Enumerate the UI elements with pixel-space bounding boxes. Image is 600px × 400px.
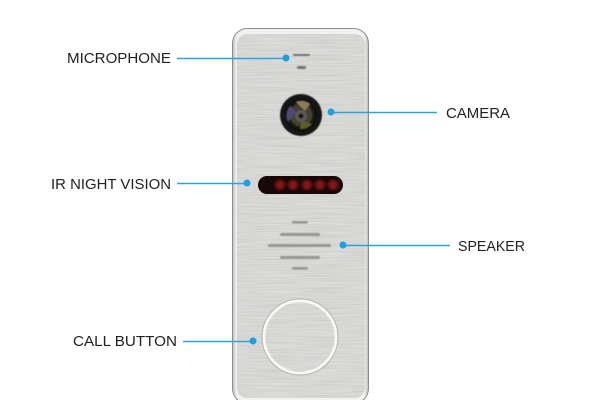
- IR night vision LED strip: [258, 176, 343, 194]
- device body: [232, 28, 368, 400]
- label: speaker: SPEAKER: [458, 239, 525, 255]
- camera lens: [280, 94, 322, 136]
- label: speaker: [340, 239, 525, 255]
- label: call button: CALL BUTTON: [73, 334, 177, 350]
- speaker slots: [268, 221, 331, 270]
- label: camera: [328, 106, 510, 122]
- label: call button: [73, 334, 256, 350]
- infographic: door camera diagram: [52, 28, 524, 400]
- label: camera: CAMERA: [446, 106, 510, 122]
- label: IR night vision: IR NIGHT VISION: [51, 177, 171, 193]
- call button: [262, 299, 338, 375]
- label: microphone: MICROPHONE: [67, 51, 171, 67]
- label: IR night vision: [51, 177, 250, 193]
- brushed metal plate: [237, 34, 365, 398]
- microphone holes: [293, 54, 310, 69]
- label: microphone: [67, 51, 290, 67]
- outer frame: [232, 28, 368, 400]
